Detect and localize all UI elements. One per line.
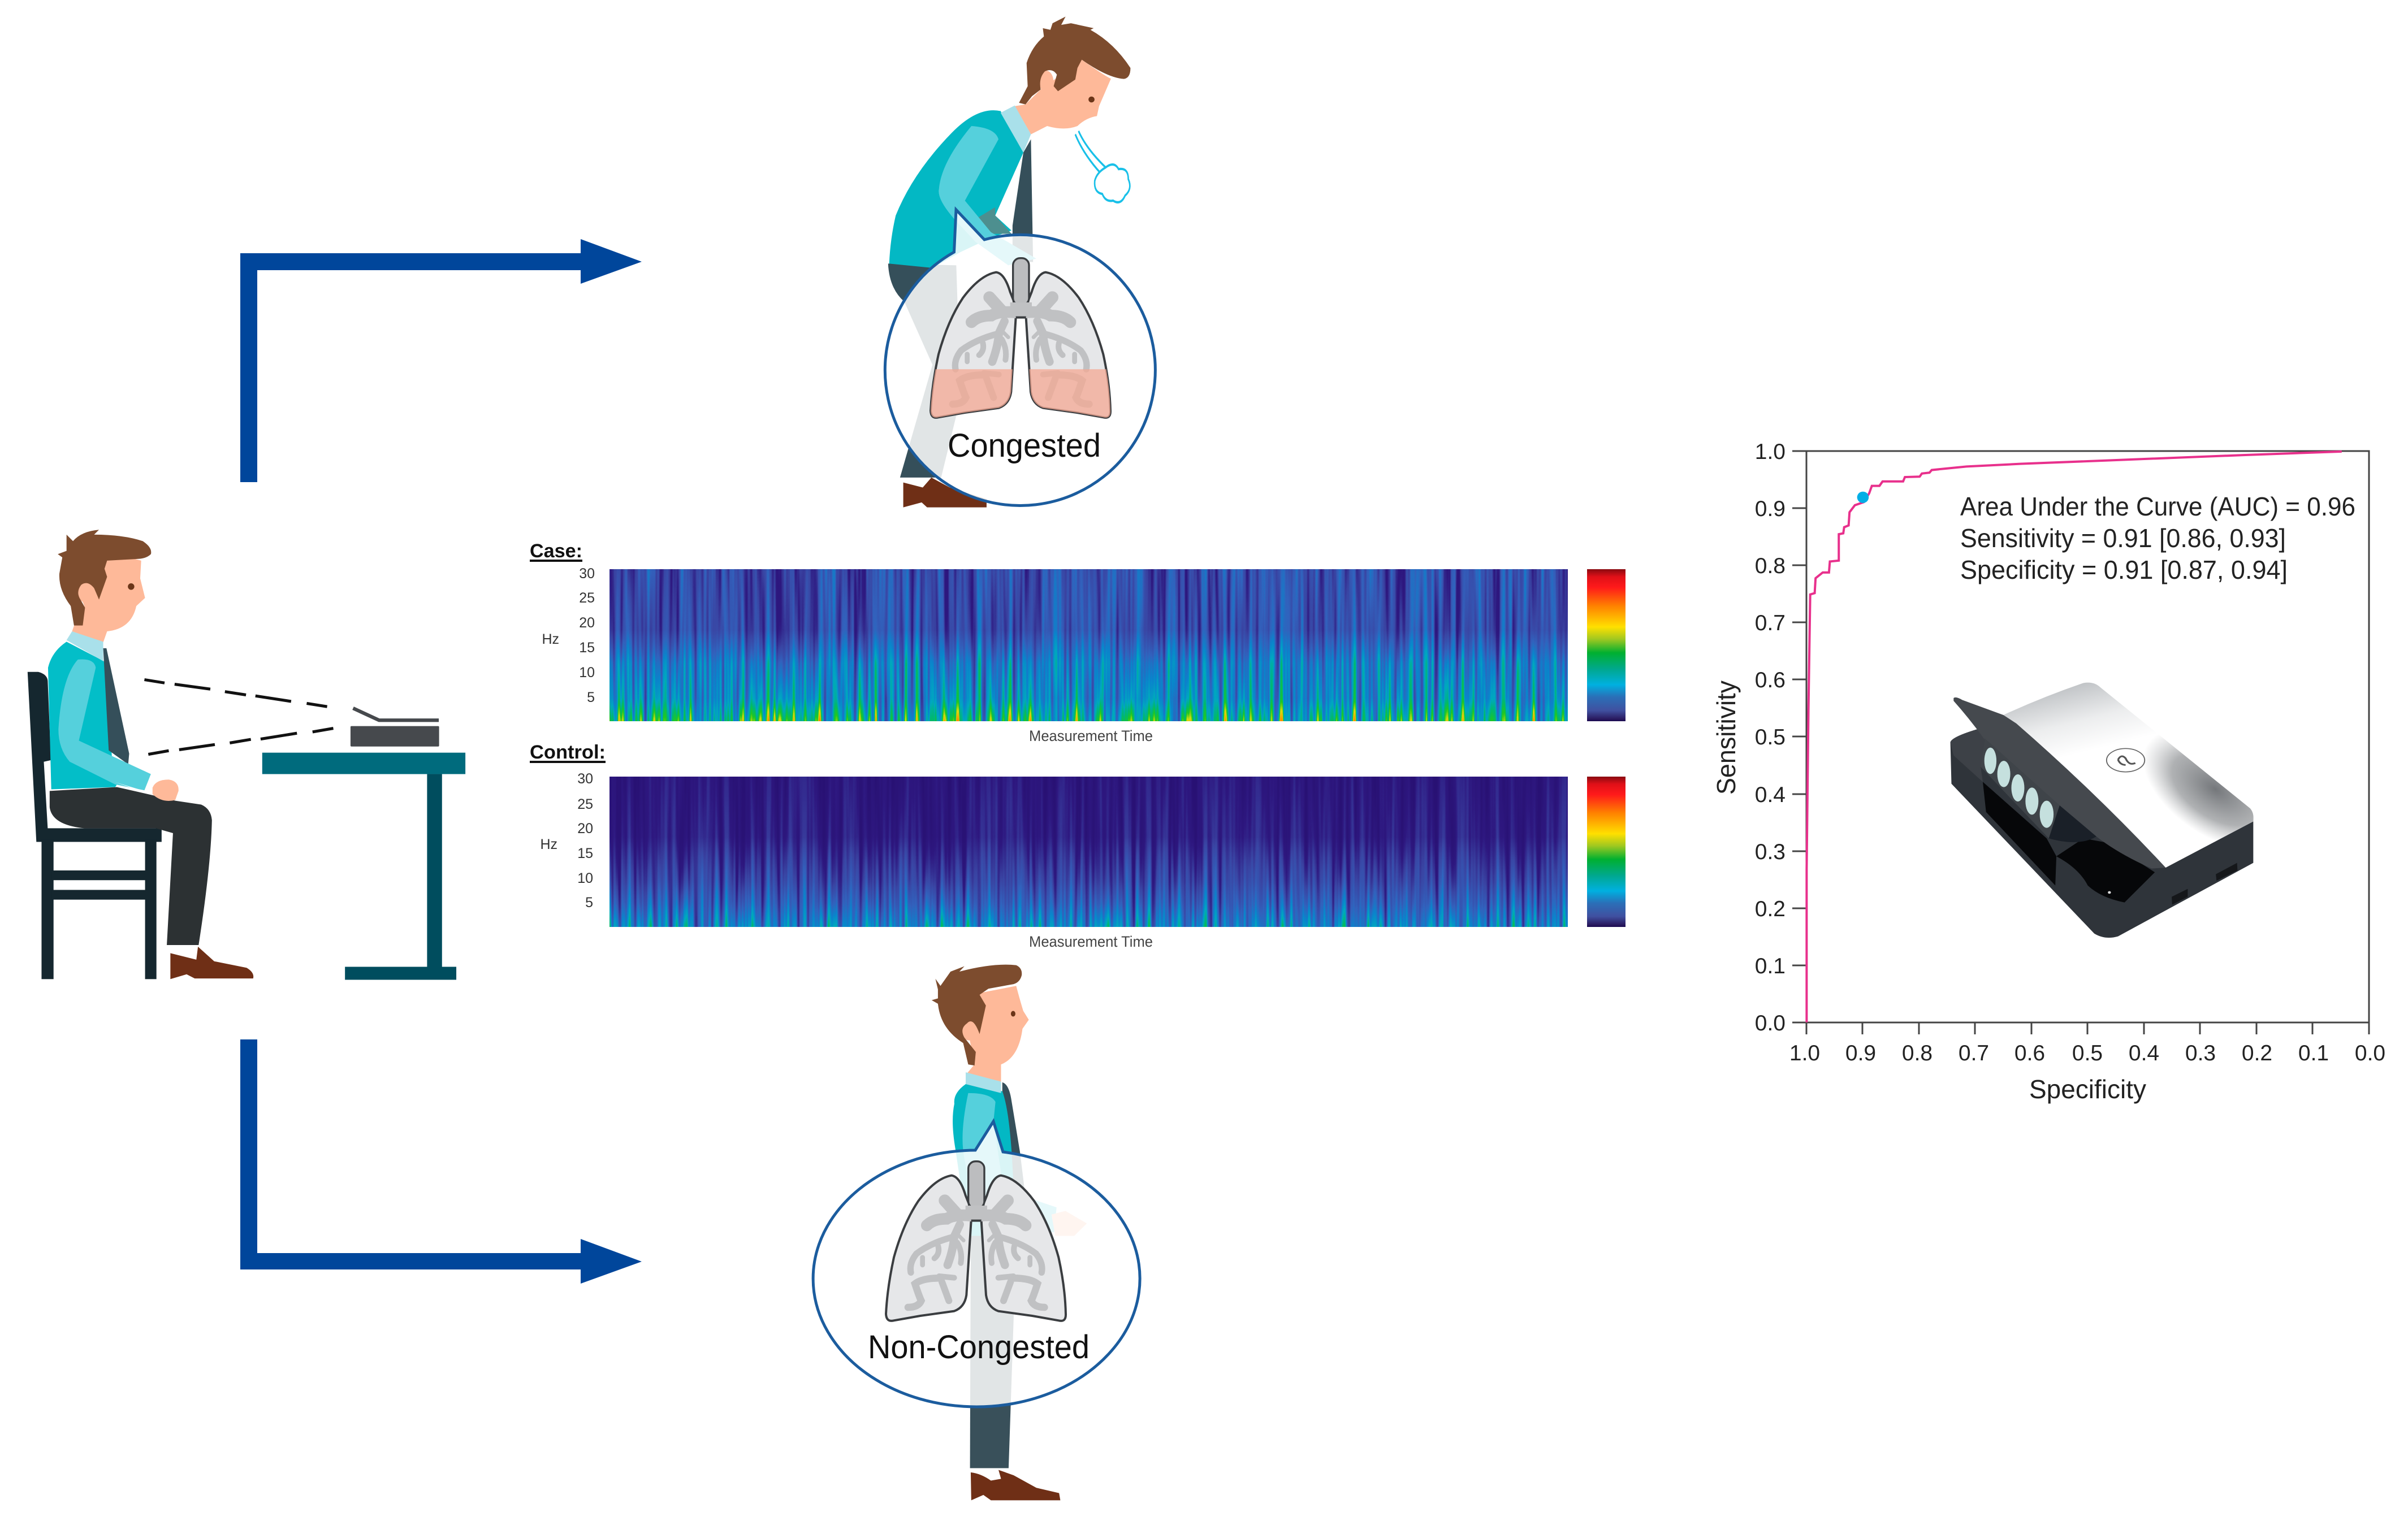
y tick labels: 0.1 [1755,954,1786,978]
arrow: down to non-congested [240,1039,642,1284]
callout bubble: congested [885,210,1155,505]
seated figure [48,530,253,979]
frequency axis: 5 [585,895,593,911]
spectrogram panel: case [530,540,1625,744]
x tick labels: 0.3 [2185,1041,2216,1065]
x tick labels: 0.8 [1902,1041,1933,1065]
axes and ticks [1792,451,2369,1034]
colour bar [1587,777,1625,927]
x tick labels: 0.7 [1959,1041,1989,1065]
axis label: Measurement Time [1029,727,1153,744]
congested patient bending [885,16,1155,508]
device on table [351,708,439,747]
frequency axis: 30 [579,566,595,582]
non-congested patient standing [813,965,1140,1500]
y tick labels: 0.7 [1755,611,1786,635]
annotation: AUC statistics [1960,492,2355,584]
figure: upright [932,965,1087,1500]
x tick labels: 0.2 [2242,1041,2272,1065]
x tick labels: 0.9 [1845,1041,1876,1065]
axis label: Measurement Time [1029,933,1153,950]
y tick labels: 0.5 [1755,725,1786,749]
frequency axis: 15 [579,640,595,656]
frequency axis: 20 [577,821,593,837]
device photo [1951,683,2254,938]
y tick labels: 0.4 [1755,783,1786,807]
label: Non-Congested: Non-Congested [868,1329,1090,1366]
x tick labels: 1.0 [1789,1041,1820,1065]
sensing dashed lines [144,679,333,755]
heading: Case: Case: [530,540,582,562]
frequency axis [540,771,593,911]
x tick labels: 0.6 [2014,1041,2045,1065]
y tick labels: 0.6 [1755,668,1786,692]
seated patient with device on table [28,530,465,980]
frequency axis: Hz [540,837,557,852]
table [262,753,465,980]
annotation: AUC statistics: Area Under the Curve (AUC) = 0.96 [1960,492,2355,521]
ROC curve [1806,452,2342,1022]
frequency axis: 10 [579,665,595,681]
callout bubble: non-congested [813,1121,1140,1407]
arrow: up to congested [240,239,642,482]
frequency axis: 5 [587,690,595,705]
x tick labels [1789,1041,2385,1065]
lungs: congested with fluid [931,258,1110,418]
annotation: AUC statistics: Sensitivity = 0.91 [0.86, 0.93] [1960,523,2286,553]
frequency axis: 25 [579,590,595,606]
colour bar [1587,569,1625,721]
heatmap [609,569,1568,721]
frequency axis: 15 [577,846,593,861]
spectrogram panel: control [530,742,1625,950]
x tick labels: 0.1 [2298,1041,2329,1065]
label: Congested: Congested [948,427,1101,464]
x tick labels: 0.5 [2072,1041,2103,1065]
x axis title: Specificity [2029,1074,2146,1104]
frequency axis: 30 [577,771,593,787]
x tick labels: 0.0 [2355,1041,2385,1065]
frequency axis: 10 [577,870,593,886]
heading: Control: Control: [530,742,606,763]
y tick labels: 0.0 [1755,1011,1786,1035]
frequency axis [542,566,595,705]
figure: bent over [888,16,1130,508]
lungs: clear [886,1162,1066,1321]
chair [28,672,162,979]
ROC chart [1711,440,2385,1104]
frequency axis: Hz [542,631,559,647]
annotation: AUC statistics: Specificity = 0.91 [0.87, 0.94] [1960,555,2288,584]
heatmap [609,777,1568,927]
y tick labels [1755,440,1786,1035]
x tick labels: 0.4 [2129,1041,2159,1065]
y tick labels: 1.0 [1755,440,1786,464]
breath puff [1075,131,1130,202]
y tick labels: 0.2 [1755,897,1786,921]
frequency axis: 25 [577,796,593,812]
y tick labels: 0.8 [1755,554,1786,578]
y tick labels: 0.9 [1755,497,1786,521]
frequency axis: 20 [579,615,595,631]
y axis title: Sensitivity [1711,681,1741,795]
y tick labels: 0.3 [1755,840,1786,864]
